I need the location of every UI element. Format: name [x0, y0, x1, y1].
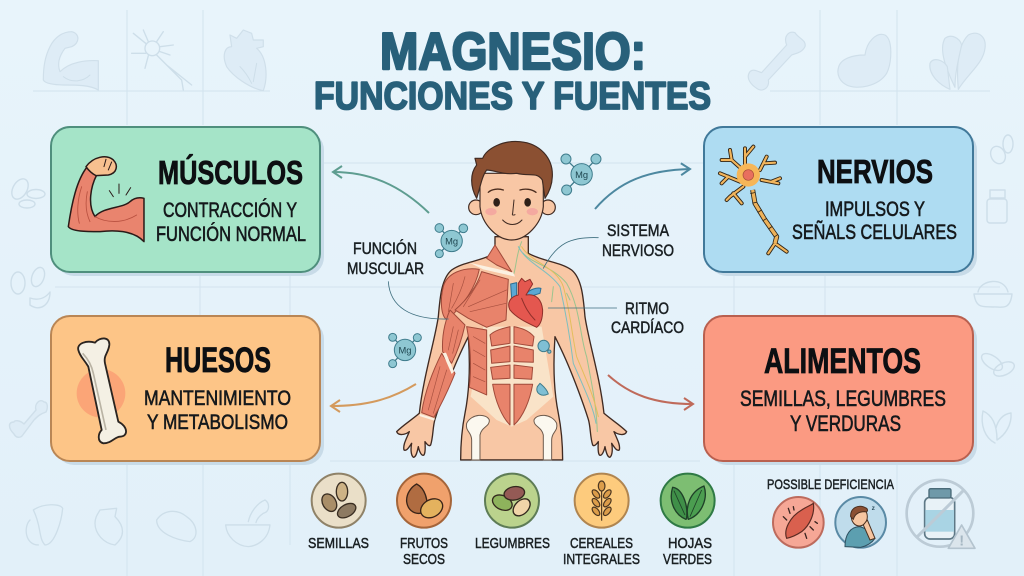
label: ritmo cardíaco: CARDÍACO [611, 318, 684, 337]
text: nervios [792, 153, 957, 244]
labels: food sources: CEREALES [570, 535, 633, 552]
icon: cereales [575, 474, 629, 528]
icon: tired person: z [872, 505, 876, 512]
head [469, 141, 555, 240]
leader lines [388, 238, 617, 319]
labels: food sources: INTEGRALES [563, 551, 640, 568]
text: nervios: SEÑALS CELULARES [792, 220, 957, 244]
icon: bone [77, 338, 126, 443]
label: sistema nervioso: SISTEMA [607, 222, 669, 240]
tendon [419, 353, 454, 421]
Mg molecule 2: Mg [575, 170, 588, 180]
icon: supplement prohibited: ! [959, 534, 964, 550]
panel: nervios [704, 127, 977, 276]
labels: food sources: VERDES [663, 551, 712, 568]
text: alimentos: SEMILLAS, LEGUMBRES [740, 386, 946, 411]
icon: neuron [720, 147, 787, 253]
text: músculos: MÚSCULOS [158, 154, 303, 191]
text: huesos: MANTENIMIENTO [144, 387, 291, 410]
Mg molecule 1 [435, 224, 468, 258]
text: alimentos: ALIMENTOS [764, 342, 921, 381]
muscles [422, 245, 534, 425]
panel: músculos [51, 127, 324, 276]
text: huesos: HUESOS [165, 341, 271, 380]
panel: huesos [51, 316, 324, 465]
label: ritmo cardíaco [611, 300, 684, 337]
title [314, 23, 711, 118]
background icon: bean [838, 34, 891, 87]
Mg molecule 3: Mg [399, 346, 411, 356]
background icon: neuron [132, 30, 192, 90]
background icon: left nuts [11, 266, 50, 308]
text: huesos: Y METABOLISMO [147, 411, 288, 434]
background icon: biceps [43, 32, 98, 90]
label: función muscular: MUSCULAR [347, 260, 424, 278]
heading: posible deficiencia: POSSIBLE DEFICIENCIA [767, 476, 895, 492]
background icon: leaves [930, 33, 985, 89]
background icon: left seeds [8, 176, 45, 208]
icon: supplement prohibited [907, 480, 975, 550]
icon: hojas verdes [661, 474, 715, 528]
labels: food sources [308, 535, 712, 568]
body silhouette [397, 237, 627, 460]
Mg molecule 1: Mg [445, 237, 458, 247]
panel: alimentos [704, 316, 977, 465]
labels: food sources: FRUTOS [400, 535, 448, 552]
arrow: to alimentos [608, 375, 693, 404]
nerves [514, 242, 598, 432]
icon: semillas [312, 474, 366, 528]
Mg molecule 2 [561, 154, 601, 195]
text: músculos: CONTRACCIÓN Y [163, 199, 297, 222]
deficiency section [767, 476, 975, 550]
background icon: heart [224, 30, 266, 91]
icon: tired person [835, 497, 886, 548]
label: sistema nervioso [602, 222, 674, 260]
human body figure [388, 141, 627, 460]
label: sistema nervioso: NERVIOSO [602, 242, 674, 260]
text: músculos: FUNCIÓN NORMAL [156, 223, 306, 246]
clavicle band [469, 263, 515, 277]
background icon: bone [748, 32, 805, 90]
icon: muscle cramp [773, 497, 824, 548]
pelvic bones [466, 415, 557, 460]
text: músculos [156, 154, 306, 246]
label: ritmo cardíaco: RITMO [625, 300, 669, 318]
text: nervios: IMPULSOS Y [825, 198, 925, 221]
title: FUNCIONES Y FUENTES [314, 75, 711, 118]
text: huesos [144, 341, 291, 434]
labels: food sources: LEGUMBRES [475, 535, 550, 552]
background icons: bottom row [26, 500, 270, 547]
label: función muscular [347, 239, 424, 278]
text: nervios: NERVIOS [817, 153, 933, 190]
labels: food sources: SEMILLAS [308, 535, 369, 552]
icon: legumbres [485, 474, 539, 528]
icon: flexed arm [68, 157, 144, 242]
abdomen and pelvis [471, 327, 553, 427]
muscle fibres [428, 277, 507, 413]
arrow: to huesos [331, 384, 416, 406]
labels: food sources: SECOS [403, 551, 445, 568]
Mg molecule 3 [389, 333, 421, 368]
icon: frutos secos [397, 474, 451, 528]
title: MAGNESIO: [380, 23, 646, 81]
arrow: to nervios [595, 169, 690, 209]
labels: food sources: HOJAS [668, 535, 712, 552]
arrow: to músculos [333, 172, 429, 213]
axon [753, 190, 777, 243]
background icons: right column [974, 135, 1017, 443]
background icon: left bone [10, 401, 47, 437]
text: alimentos: Y VERDURAS [790, 411, 901, 436]
heart [509, 278, 543, 327]
label: función muscular: FUNCIÓN [353, 239, 417, 258]
food sources row [308, 474, 715, 568]
small ions [537, 340, 551, 395]
text: alimentos [740, 342, 946, 436]
